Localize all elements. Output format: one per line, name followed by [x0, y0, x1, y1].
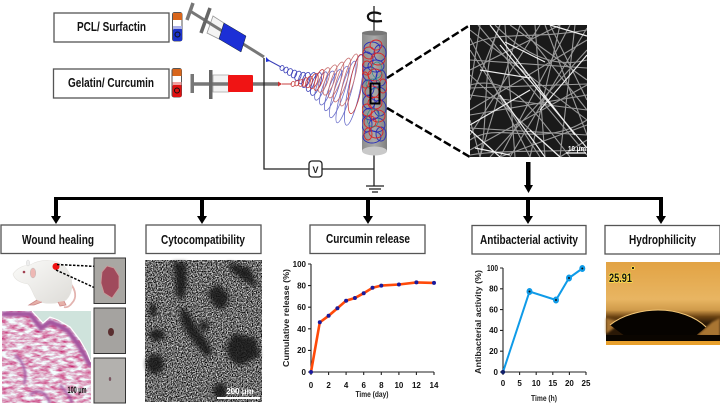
- dotted lines to wound photo: [56, 264, 108, 292]
- x tick labels: 2: [326, 381, 331, 390]
- photo: healed wound: [94, 358, 126, 403]
- contact angle photo: [606, 262, 720, 345]
- y tick labels: 60: [297, 303, 307, 312]
- heading: Hydrophilicity: [605, 226, 720, 254]
- heading: Cytocompatibility: Cytocompatibility: [161, 232, 246, 247]
- label: PCL/ Surfactin: [54, 13, 169, 42]
- x tick labels: [501, 379, 591, 388]
- rotating collector cylinder: [362, 6, 387, 156]
- heading: Cytocompatibility: [146, 225, 261, 254]
- label: Gelatin/ Curcumin: [54, 69, 169, 98]
- x tick labels: 10: [532, 379, 541, 388]
- connector tree with arrows: [51, 197, 666, 224]
- icon: red vial: [172, 68, 182, 97]
- heading: Curcumin release: Curcumin release: [326, 231, 410, 246]
- chart: antibacterial activity: Antibacterial activity (%): [474, 270, 483, 374]
- y tick labels: 80: [297, 282, 307, 290]
- x tick labels: 0: [309, 381, 314, 390]
- scale bar: [217, 387, 260, 399]
- label: PCL/ Surfactin: PCL/ Surfactin: [77, 19, 146, 34]
- photo: day 0 wound: [94, 258, 126, 304]
- axes: [308, 264, 434, 375]
- histology section: [2, 311, 91, 403]
- label: Gelatin/ Curcumin: Gelatin/ Curcumin: [68, 75, 154, 90]
- contact angle value: 25.91: [609, 271, 632, 285]
- photo: mid-healing wound: [94, 308, 126, 354]
- y tick labels: 0: [494, 368, 499, 377]
- axes: [500, 268, 586, 375]
- icon: blue syringe: [187, 3, 264, 57]
- x tick labels: 5: [517, 379, 522, 388]
- magnified region marker: [370, 84, 380, 104]
- y tick labels: [293, 260, 307, 377]
- heading: Wound healing: [1, 225, 115, 254]
- chart: antibacterial activity: [474, 264, 591, 403]
- scale bar: 10 μm: [568, 146, 586, 153]
- x tick labels: 12: [412, 381, 421, 390]
- fluorescence micrograph: [145, 260, 262, 402]
- fibre jet: blue: [266, 54, 367, 126]
- fibre jet: red: [282, 53, 367, 115]
- y tick labels: 80: [489, 284, 499, 294]
- arrow from SEM image to tree: [524, 162, 533, 193]
- heading: Curcumin release: [310, 225, 425, 254]
- y tick labels: [487, 264, 499, 377]
- chart: curcumin cumulative release: Cumulative release (%): [282, 269, 291, 367]
- activity curve: [503, 268, 582, 372]
- x tick labels: 15: [548, 379, 558, 388]
- chart: antibacterial activity: Time (h): [531, 394, 557, 403]
- x tick labels: 25: [582, 379, 591, 388]
- y tick labels: 20: [489, 347, 499, 356]
- SEM image of nanofibres: [470, 25, 587, 157]
- chart: curcumin cumulative release: Time (day): [356, 389, 389, 399]
- release curve: [311, 282, 434, 372]
- y tick labels: 40: [297, 325, 307, 334]
- icon: red syringe: [190, 70, 282, 99]
- scale bar: 200 μm: [226, 387, 254, 396]
- x tick labels: [309, 381, 439, 390]
- icon: white mouse with wound site: [13, 260, 75, 307]
- wiring with voltage source: V: [312, 165, 319, 175]
- y tick labels: 20: [297, 346, 307, 355]
- x tick labels: 14: [430, 381, 439, 390]
- y tick labels: 0: [302, 368, 307, 377]
- heading: Hydrophilicity: Hydrophilicity: [629, 232, 697, 247]
- x tick labels: 6: [361, 381, 366, 390]
- chart: curcumin cumulative release: [282, 260, 439, 399]
- deposited fibres on the collector: [361, 40, 387, 143]
- y tick labels: 100: [487, 264, 498, 273]
- wiring with voltage source: [264, 58, 384, 192]
- dashed zoom lines: [387, 25, 470, 157]
- y tick labels: 60: [489, 306, 499, 314]
- heading: Antibacterial activity: Antibacterial activity: [480, 232, 579, 247]
- x tick labels: 0: [501, 379, 506, 388]
- histology section: 100 μm: [68, 385, 86, 395]
- water droplet: [610, 310, 706, 336]
- y tick labels: 100: [293, 260, 307, 269]
- x tick labels: 4: [344, 381, 349, 390]
- x tick labels: 8: [379, 381, 384, 390]
- y tick labels: 40: [489, 326, 499, 335]
- icon: blue vial: [172, 12, 182, 41]
- x tick labels: 10: [394, 381, 404, 390]
- heading: Antibacterial activity: [472, 226, 586, 254]
- x tick labels: 20: [565, 379, 574, 388]
- heading: Wound healing: Wound healing: [22, 232, 94, 247]
